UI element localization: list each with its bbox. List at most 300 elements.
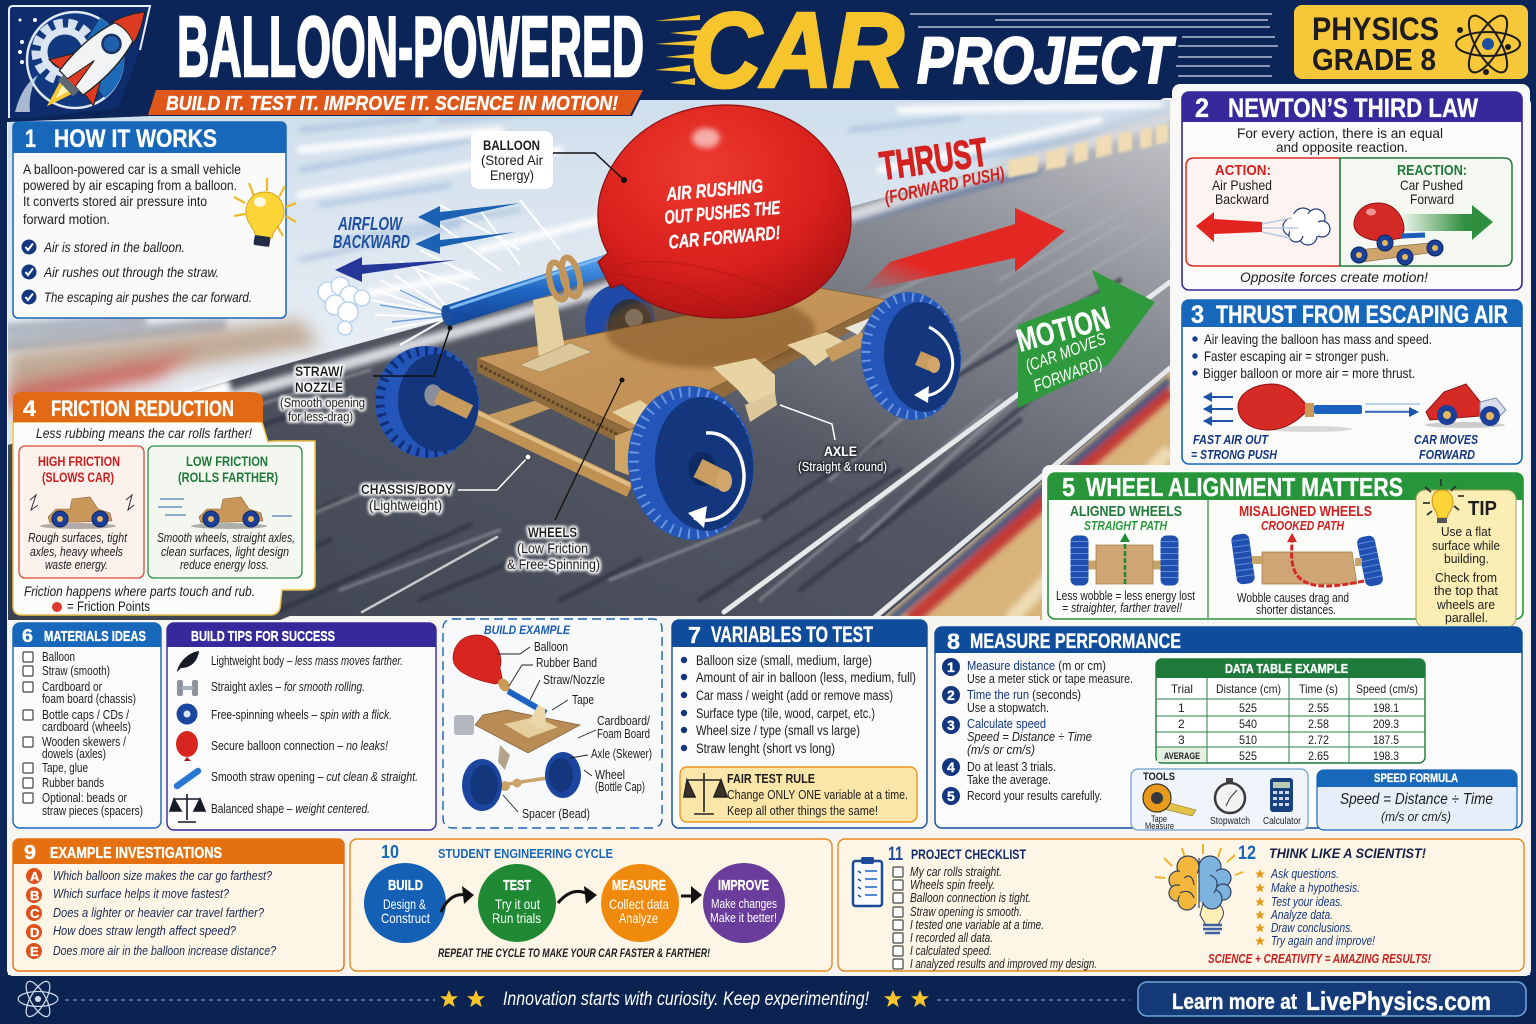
stars bbox=[440, 990, 485, 1007]
step: measure: MEASURE bbox=[612, 877, 666, 894]
icon: axle bbox=[177, 680, 198, 696]
tools box: Measure bbox=[1145, 821, 1174, 831]
materials checklist: Wooden skewers / bbox=[42, 735, 126, 749]
airflow puffs and spray bbox=[318, 200, 560, 345]
bullets: Air leaving the balloon has mass and speed. bbox=[1204, 331, 1432, 347]
panel 3 heading: 3 bbox=[1191, 301, 1204, 329]
variable list: Straw lenght (short vs long) bbox=[696, 741, 835, 756]
project checklist: I calculated speed. bbox=[910, 944, 992, 958]
caption: Opposite forces create motion! bbox=[1240, 269, 1428, 285]
panel 10 heading: STUDENT ENGINEERING CYCLE bbox=[438, 846, 613, 861]
tips text bbox=[211, 653, 418, 816]
motion arrow: MOTION bbox=[1012, 299, 1114, 359]
step: improve bbox=[703, 863, 785, 943]
data table: 1 bbox=[1178, 701, 1185, 715]
variable list: Balloon size (small, medium, large) bbox=[696, 653, 872, 668]
left wheel bbox=[369, 341, 485, 463]
icon: calculator bbox=[1270, 778, 1293, 812]
data table: Speed (cm/s) bbox=[1356, 682, 1418, 696]
intro text: A balloon-powered car is a small vehicle bbox=[23, 161, 241, 177]
motion arrow bbox=[1012, 270, 1155, 408]
panel 9 heading: 9 bbox=[24, 842, 36, 864]
panel 6 heading: 6 bbox=[22, 626, 33, 646]
speed formula box: Speed = Distance ÷ Time bbox=[1340, 791, 1493, 808]
icon: balance scale bbox=[684, 773, 727, 814]
materials checklist bbox=[23, 650, 143, 818]
high friction box: Rough surfaces, tight bbox=[28, 530, 128, 545]
project checklist: I analyzed results and improved my design. bbox=[910, 957, 1097, 971]
panel 6: materials ideas bbox=[13, 623, 161, 828]
callout: fair test rule: Keep all other things the same! bbox=[727, 803, 878, 818]
callout: balloon: BALLOON bbox=[483, 137, 540, 153]
panel 9: example investigations bbox=[13, 839, 344, 971]
exploded car diagram bbox=[453, 635, 581, 811]
panel 8 heading bbox=[935, 627, 1522, 654]
bullets bbox=[1192, 331, 1432, 381]
low friction box: (ROLLS FARTHER) bbox=[178, 469, 278, 485]
panel 10 heading bbox=[381, 842, 613, 862]
footer motto: Innovation starts with curiosity. Keep experimenting! bbox=[503, 989, 870, 1010]
statement bbox=[1237, 125, 1443, 155]
numbered steps: Use a meter stick or tape measure. bbox=[967, 672, 1133, 686]
panel 11 and 12 frame bbox=[838, 839, 1524, 971]
variable list: Amount of air in balloon (less, medium, full) bbox=[696, 670, 916, 685]
icon: balloon bbox=[176, 731, 198, 761]
panel 4: friction reduction bbox=[13, 392, 315, 615]
footer band bbox=[0, 976, 1536, 1024]
diagram captions: FAST AIR OUT bbox=[1193, 432, 1269, 447]
far back wheel bbox=[585, 284, 655, 360]
tip text bbox=[1432, 524, 1500, 625]
data table bbox=[1156, 659, 1425, 763]
panel 4 heading: 4 bbox=[23, 396, 37, 421]
data table: 2 bbox=[1178, 717, 1185, 731]
panel 1 heading: HOW IT WORKS bbox=[54, 125, 217, 153]
misaligned wheels: Wobble causes drag and bbox=[1237, 590, 1349, 605]
data table: 3 bbox=[1178, 733, 1185, 747]
bullets: Bigger balloon or more air = more thrust. bbox=[1203, 365, 1415, 381]
scientist list: Ask questions. bbox=[1270, 867, 1339, 881]
panel 4 heading: FRICTION REDUCTION bbox=[51, 396, 234, 421]
materials checklist: Optional: beads or bbox=[42, 791, 127, 805]
icon: tip bulb bbox=[1423, 479, 1464, 523]
checklist: Air rushes out through the straw. bbox=[43, 264, 219, 280]
step: measure: Analyze bbox=[619, 910, 658, 926]
callout: wheels: (Low Friction bbox=[517, 540, 588, 556]
thrust arrow bbox=[860, 208, 1065, 292]
investigation questions: Does more air in the balloon increase distance? bbox=[53, 943, 277, 958]
speed lines behind car bbox=[655, 15, 700, 85]
callout: axle: (Straight & round) bbox=[798, 459, 887, 474]
callout: fair test rule bbox=[680, 767, 917, 822]
icon: brain light bulb bbox=[1155, 844, 1243, 933]
action box: ACTION: bbox=[1215, 162, 1271, 179]
panel: tip: TIP bbox=[1468, 498, 1497, 520]
part labels: Foam Board bbox=[597, 727, 650, 741]
part labels: Rubber Band bbox=[536, 656, 597, 670]
callout: wheels bbox=[507, 378, 624, 572]
action box bbox=[1186, 158, 1340, 266]
numbered steps: Record your results carefully. bbox=[967, 789, 1102, 803]
numbered steps bbox=[942, 658, 1133, 805]
tagline banner: BUILD IT. TEST IT. IMPROVE IT. SCIENCE IN MOTION! bbox=[166, 93, 618, 115]
project checklist: Straw opening is smooth. bbox=[910, 905, 1022, 919]
scientist list: Try again and improve! bbox=[1271, 934, 1375, 948]
panel 9 heading bbox=[13, 839, 344, 864]
scientist list: Draw conclusions. bbox=[1271, 921, 1353, 935]
step: improve: IMPROVE bbox=[718, 877, 769, 894]
balloon text bbox=[662, 175, 784, 254]
build tips heading: BUILD TIPS FOR SUCCESS bbox=[191, 628, 335, 645]
tip text: Check from bbox=[1435, 570, 1497, 585]
icon: wheel bbox=[176, 704, 198, 724]
numbered steps: Do at least 3 trials. bbox=[967, 760, 1056, 774]
tips text: Straight axles – for smooth rolling. bbox=[211, 679, 365, 694]
straw bbox=[439, 257, 610, 328]
low friction box: clean surfaces, light design bbox=[161, 544, 289, 559]
title: balloon-powered: BALLOON-POWERED bbox=[177, 0, 644, 95]
panel 11 heading bbox=[888, 844, 1026, 865]
numbered steps: 3 bbox=[947, 717, 955, 733]
chassis board bbox=[477, 288, 888, 478]
high friction box: (SLOWS CAR) bbox=[42, 469, 114, 485]
intro text: It converts stored air pressure into bbox=[23, 193, 207, 209]
action box: Backward bbox=[1215, 191, 1269, 207]
website button: LivePhysics.com bbox=[1306, 986, 1491, 1016]
numbered steps: Use a stopwatch. bbox=[967, 701, 1049, 715]
tools box: Tape bbox=[1151, 814, 1167, 824]
step: test: Try it out bbox=[495, 896, 540, 912]
badge: physics grade 8: GRADE 8 bbox=[1312, 42, 1436, 77]
numbered steps: 2 bbox=[947, 687, 955, 703]
tip text: Use a flat bbox=[1441, 524, 1491, 539]
part leaders bbox=[497, 647, 596, 812]
investigation questions: C bbox=[30, 906, 40, 921]
investigation questions: B bbox=[30, 888, 39, 903]
numbered steps: Time the run (seconds) bbox=[967, 688, 1081, 702]
airflow arrows bbox=[333, 203, 520, 282]
data table: 540 bbox=[1239, 717, 1257, 731]
variable list bbox=[681, 653, 916, 756]
variable list: Wheel size / type (small vs large) bbox=[696, 723, 860, 738]
high friction box: axles, heavy wheels bbox=[30, 544, 123, 559]
tip text: the top that bbox=[1434, 583, 1498, 598]
arrow: measure to improve bbox=[681, 886, 702, 904]
step: test: Run trials bbox=[492, 910, 541, 926]
data table: 2.58 bbox=[1308, 717, 1329, 731]
tools box bbox=[1131, 769, 1308, 831]
numbered steps: Calculate speed bbox=[967, 717, 1046, 731]
diagram captions: = STRONG PUSH bbox=[1191, 447, 1277, 462]
mini red car bbox=[1425, 384, 1506, 428]
subtitle: Less rubbing means the car rolls farther! bbox=[36, 426, 252, 441]
materials checklist: dowels (axles) bbox=[42, 747, 106, 761]
step: build: Construct bbox=[381, 910, 430, 926]
panel 3: thrust from escaping air bbox=[1182, 300, 1522, 464]
data table: 510 bbox=[1239, 733, 1257, 747]
intro text: powered by air escaping from a balloon. bbox=[23, 177, 237, 193]
reaction box: Car Pushed bbox=[1400, 177, 1463, 193]
logo badge: rocket and gear bbox=[9, 0, 167, 129]
project checklist: Wheels spin freely. bbox=[910, 878, 995, 892]
investigation questions: A bbox=[30, 869, 40, 884]
road streaks bbox=[263, 236, 1124, 612]
statement: and opposite reaction. bbox=[1276, 139, 1408, 155]
panel 1 heading bbox=[13, 122, 286, 153]
statement: For every action, there is an equal bbox=[1237, 125, 1443, 141]
tools box: Stopwatch bbox=[1210, 816, 1250, 827]
tools box: Calculator bbox=[1263, 816, 1302, 827]
tip text: surface while bbox=[1432, 538, 1500, 553]
high friction box: HIGH FRICTION bbox=[38, 453, 120, 469]
part labels: Spacer (Bead) bbox=[522, 807, 590, 821]
cycle note: REPEAT THE CYCLE TO MAKE YOUR CAR FASTER & FARTHER! bbox=[438, 946, 710, 960]
data table: 525 bbox=[1239, 701, 1257, 715]
data table: 209.3 bbox=[1373, 717, 1399, 731]
intro text bbox=[23, 161, 241, 227]
numbered steps: 1 bbox=[947, 659, 955, 675]
checklist: Air is stored in the balloon. bbox=[43, 239, 185, 255]
panel 11 heading: PROJECT CHECKLIST bbox=[911, 846, 1026, 862]
panel 10 heading: 10 bbox=[381, 842, 399, 862]
aligned wheels: ALIGNED WHEELS bbox=[1070, 503, 1182, 520]
low friction box: LOW FRICTION bbox=[186, 453, 268, 469]
scientist list bbox=[1255, 867, 1375, 948]
axle end on left wheel bbox=[437, 396, 470, 412]
callout: fair test rule: FAIR TEST RULE bbox=[727, 771, 815, 786]
numbered steps: (m/s or cm/s) bbox=[967, 743, 1035, 757]
panel 6 heading bbox=[13, 623, 161, 647]
front wheel spin arrow bbox=[688, 433, 744, 528]
icon: stopwatch bbox=[1215, 778, 1245, 813]
high friction box: waste energy. bbox=[45, 557, 108, 572]
low friction box: reduce energy loss. bbox=[180, 557, 269, 572]
callout: straw/nozzle: NOZZLE bbox=[295, 379, 343, 395]
panel: build tips bbox=[167, 623, 436, 830]
data table: 198.3 bbox=[1373, 749, 1399, 763]
investigation questions bbox=[26, 868, 277, 959]
tips text: Secure balloon connection – no leaks! bbox=[211, 738, 388, 753]
brain lobes bbox=[1169, 856, 1231, 910]
callout: fair test rule: Change ONLY ONE variable at a time. bbox=[727, 787, 908, 802]
materials checklist: Balloon bbox=[42, 650, 75, 664]
misaligned wheels: MISALIGNED WHEELS bbox=[1239, 503, 1372, 520]
callout: balloon: (Stored Air bbox=[481, 152, 543, 168]
panel 5: wheel alignment matters bbox=[1042, 465, 1531, 625]
step: measure bbox=[601, 864, 679, 942]
arrow: test to measure bbox=[558, 886, 597, 904]
balloon body bbox=[546, 105, 851, 318]
build tips heading bbox=[167, 623, 436, 647]
scientist list: Test your ideas. bbox=[1271, 895, 1343, 909]
icon: clipboard bbox=[853, 857, 882, 906]
tip text: building. bbox=[1444, 551, 1489, 566]
part labels: Straw/Nozzle bbox=[543, 673, 605, 687]
panel 2 heading: NEWTON’S THIRD LAW bbox=[1228, 93, 1478, 123]
balloon text: OUT PUSHES THE bbox=[664, 198, 782, 229]
numbered steps: 5 bbox=[947, 788, 955, 804]
callout: wheels: & Free-Spinning) bbox=[507, 556, 600, 572]
panel 12 heading bbox=[1238, 843, 1426, 864]
speed formula box: (m/s or cm/s) bbox=[1381, 809, 1451, 824]
step: test: TEST bbox=[503, 877, 531, 894]
axle stub front bbox=[698, 468, 732, 492]
aligned wheels: STRAIGHT PATH bbox=[1084, 519, 1168, 533]
checklist bbox=[22, 239, 252, 305]
title: project: PROJECT bbox=[917, 23, 1176, 97]
stars right bbox=[884, 990, 929, 1007]
data table: Trial bbox=[1171, 682, 1193, 696]
misaligned wheels: CROOKED PATH bbox=[1261, 519, 1345, 533]
materials checklist: Rubber bands bbox=[42, 776, 104, 790]
diagram captions: FORWARD bbox=[1419, 447, 1476, 462]
callout: axle: AXLE bbox=[824, 443, 857, 459]
data table: AVERAGE bbox=[1164, 751, 1200, 761]
website button bbox=[1138, 982, 1526, 1016]
panel 12 heading: 12 bbox=[1238, 843, 1256, 864]
misaligned wheels bbox=[1231, 503, 1384, 617]
callout: chassis bbox=[361, 454, 531, 513]
materials checklist: Bottle caps / CDs / bbox=[42, 708, 129, 722]
reaction box: Forward bbox=[1410, 191, 1454, 207]
panel 4 heading bbox=[13, 392, 263, 422]
balloon and straw diagram bbox=[1203, 384, 1420, 432]
panel 2 heading: 2 bbox=[1195, 93, 1209, 123]
investigation questions: E bbox=[30, 944, 39, 959]
materials checklist: Straw (smooth) bbox=[42, 664, 110, 678]
lower page background bbox=[8, 616, 1530, 975]
part labels: Balloon bbox=[534, 640, 568, 654]
step: improve: Make it better! bbox=[710, 910, 777, 925]
balloon car illustration bbox=[369, 105, 966, 545]
rear wheel spin arrow and stub bbox=[914, 327, 953, 403]
part labels: Tape bbox=[572, 693, 594, 707]
icon: straw bbox=[177, 771, 198, 786]
bulb below brain bbox=[1200, 900, 1223, 933]
panel 8 heading: MEASURE PERFORMANCE bbox=[970, 630, 1181, 653]
project checklist bbox=[893, 865, 1097, 971]
website button: Learn more at bbox=[1172, 989, 1298, 1014]
panel 1 heading: 1 bbox=[25, 125, 36, 153]
icon: light bulb bbox=[234, 178, 296, 247]
icon: tape measure bbox=[1143, 784, 1196, 816]
investigation questions: Does a lighter or heavier car travel farther? bbox=[53, 905, 265, 920]
tips text: Smooth straw opening – cut clean & straight. bbox=[211, 769, 418, 784]
callout: chassis: CHASSIS/BODY bbox=[361, 481, 454, 497]
step: build: Design & bbox=[383, 896, 426, 912]
tip text: parallel. bbox=[1445, 610, 1488, 625]
rear brace and far struts bbox=[488, 393, 568, 428]
data table: 198.1 bbox=[1373, 701, 1399, 715]
data table: DATA TABLE EXAMPLE bbox=[1225, 662, 1348, 676]
project checklist: My car rolls straight. bbox=[910, 865, 1002, 879]
thrust label bbox=[877, 130, 1006, 208]
tips text: Lightweight body – less mass moves farther. bbox=[211, 653, 403, 668]
tips text: Free-spinning wheels – spin with a flick. bbox=[211, 707, 392, 722]
part labels: Wheel bbox=[595, 768, 625, 782]
callout: straw/nozzle bbox=[280, 326, 452, 424]
step: build: BUILD bbox=[388, 877, 423, 894]
panel 1: how it works bbox=[13, 122, 296, 318]
aligned wheels: = straighter, farther travel! bbox=[1062, 600, 1182, 615]
panel 6 heading: MATERIALS IDEAS bbox=[44, 628, 146, 645]
airflow arrows: BACKWARD bbox=[333, 232, 410, 252]
panel: tip bbox=[1416, 479, 1516, 627]
data table: 187.5 bbox=[1373, 733, 1399, 747]
thrust label: THRUST bbox=[877, 130, 990, 189]
rear right wheel bbox=[856, 288, 966, 424]
tools box: TOOLS bbox=[1143, 771, 1175, 783]
investigation questions: Which balloon size makes the car go farthest? bbox=[53, 868, 273, 883]
low friction box bbox=[148, 446, 302, 578]
step: improve: Make changes bbox=[711, 896, 777, 911]
panel 8: measure performance bbox=[935, 627, 1522, 831]
investigation questions: Which surface helps it move fastest? bbox=[53, 886, 230, 901]
mini balloon car bbox=[1351, 203, 1443, 265]
diagram captions: CAR MOVES bbox=[1414, 432, 1478, 447]
panel 12 heading: THINK LIKE A SCIENTIST! bbox=[1269, 845, 1426, 861]
friction note: = Friction Points bbox=[67, 598, 150, 614]
icon: atom bbox=[1456, 10, 1520, 78]
callout: axle bbox=[780, 405, 887, 474]
hero scene: motion-blurred road and sky bbox=[8, 100, 1170, 620]
panel 5 heading: 5 bbox=[1062, 472, 1075, 502]
callout: balloon: Energy) bbox=[490, 167, 534, 183]
callout: straw/nozzle: STRAW/ bbox=[295, 363, 343, 379]
panel 7: variables to test bbox=[672, 620, 927, 828]
materials checklist: cardboard (wheels) bbox=[42, 720, 131, 734]
data table: Time (s) bbox=[1299, 682, 1338, 696]
motion arrow: (CAR MOVES bbox=[1023, 329, 1109, 376]
action box: Air Pushed bbox=[1212, 177, 1272, 193]
rubber band rings bbox=[546, 256, 584, 301]
panel: build example bbox=[443, 619, 662, 828]
arrow: build to test bbox=[441, 886, 474, 912]
thrust label: (FORWARD PUSH) bbox=[883, 163, 1006, 208]
badge: physics grade 8: PHYSICS bbox=[1312, 11, 1439, 47]
panel 11 heading: 11 bbox=[888, 844, 903, 865]
panel 2: newton's third law bbox=[1172, 84, 1530, 466]
project checklist: I tested one variable at a time. bbox=[910, 918, 1044, 932]
aligned wheels bbox=[1056, 503, 1195, 615]
investigation questions: How does straw length affect speed? bbox=[53, 923, 237, 938]
axles bbox=[432, 332, 866, 490]
data table: 2.55 bbox=[1308, 701, 1329, 715]
friction note: Friction happens where parts touch and rub. bbox=[24, 583, 255, 599]
part labels bbox=[522, 640, 652, 821]
numbered steps: Speed = Distance ÷ Time bbox=[967, 730, 1092, 744]
bullets: Faster escaping air = stronger push. bbox=[1204, 348, 1389, 364]
project checklist: Balloon connection is tight. bbox=[910, 891, 1031, 905]
panel 7 heading: 7 bbox=[688, 622, 701, 648]
motion arrow: FORWARD) bbox=[1031, 353, 1105, 396]
panel 7 heading: VARIABLES TO TEST bbox=[711, 622, 873, 647]
callout: wheels: WHEELS bbox=[528, 524, 577, 540]
callout: chassis: (Lightweight) bbox=[369, 497, 442, 513]
aligned wheels: Less wobble = less energy lost bbox=[1056, 588, 1195, 603]
panel 5 heading: WHEEL ALIGNMENT MATTERS bbox=[1086, 472, 1403, 502]
badge: physics grade 8 bbox=[1294, 5, 1528, 79]
data table: 2.65 bbox=[1308, 749, 1329, 763]
scientist list: Make a hypothesis. bbox=[1271, 881, 1360, 895]
airflow arrows: AIRFLOW bbox=[337, 214, 404, 234]
icon: footer atom bbox=[18, 978, 58, 1020]
speed formula box bbox=[1317, 770, 1517, 830]
panel 8 heading: 8 bbox=[947, 629, 960, 654]
panel 9 heading: EXAMPLE INVESTIGATIONS bbox=[50, 845, 222, 862]
reaction box: REACTION: bbox=[1397, 162, 1467, 179]
front right wheel bbox=[622, 381, 760, 545]
